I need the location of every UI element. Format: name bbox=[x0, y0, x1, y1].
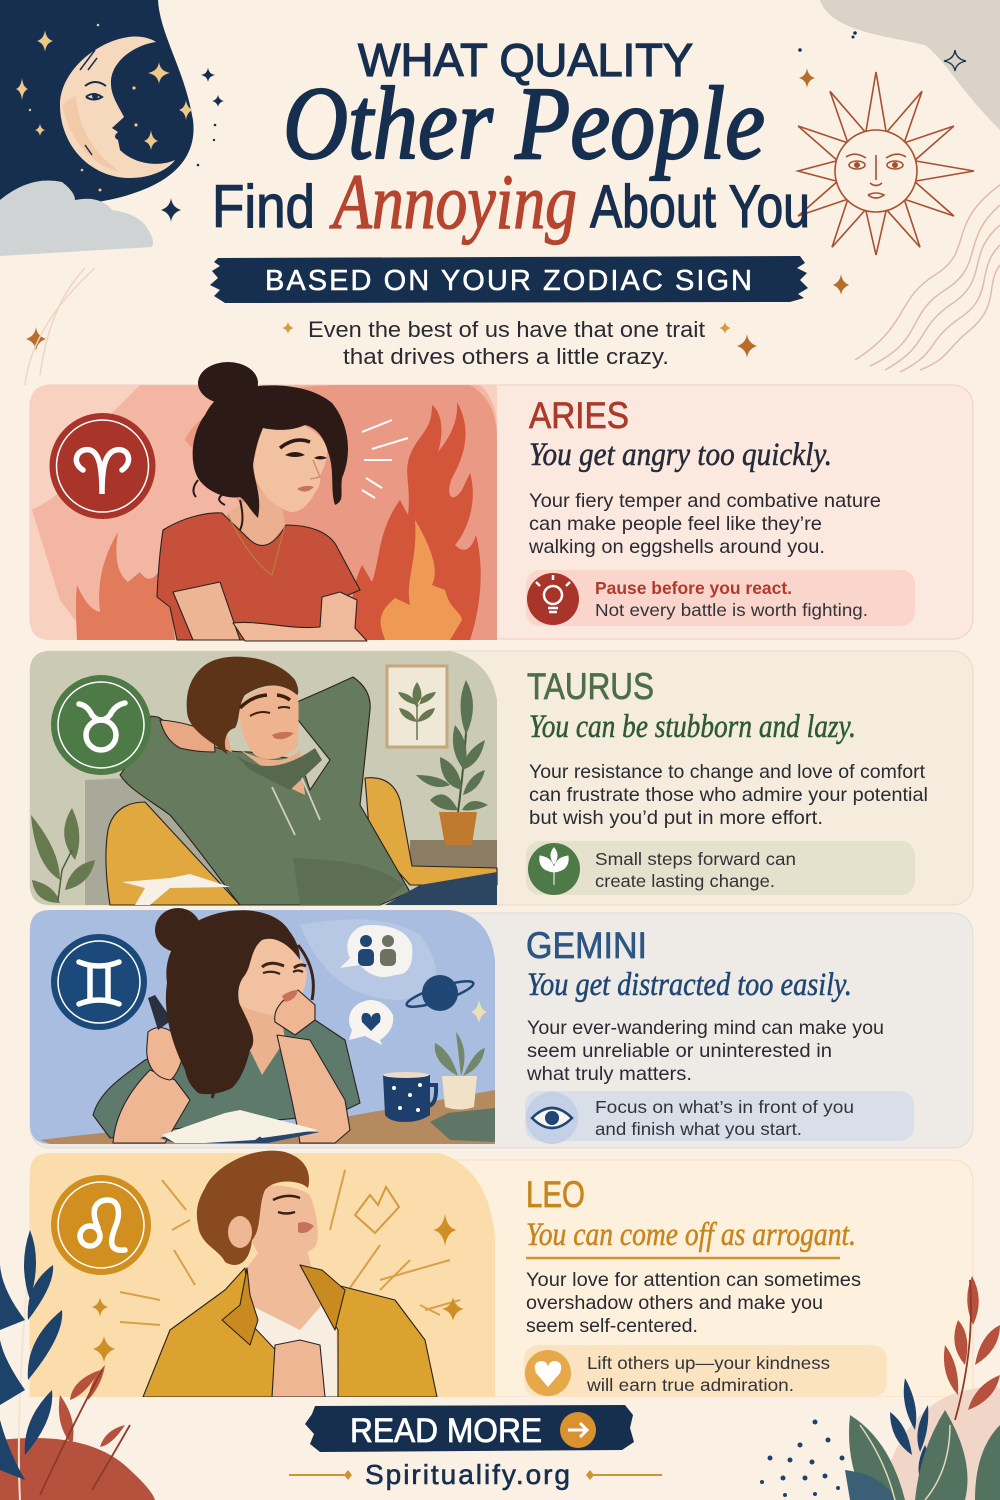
aries heading: ARIES bbox=[529, 395, 629, 436]
leo tip bbox=[524, 1345, 887, 1397]
top-left night sky blob bbox=[0, 0, 194, 205]
gemini body: what truly matters. bbox=[526, 1063, 692, 1085]
desk bbox=[40, 1090, 495, 1144]
flame left bbox=[76, 532, 175, 640]
intro text: that drives others a little crazy. bbox=[343, 344, 669, 369]
icon: eye bbox=[526, 1092, 578, 1144]
panel: leo bbox=[30, 1151, 973, 1397]
footer background wash bbox=[0, 1397, 1000, 1500]
open book bbox=[160, 1110, 320, 1143]
wavy lines bbox=[25, 185, 1000, 385]
leo man bbox=[143, 1151, 437, 1397]
intro text bbox=[308, 317, 705, 369]
gemini heading: GEMINI bbox=[526, 925, 647, 966]
crescent moon with face bbox=[60, 37, 175, 178]
framed leaf art bbox=[387, 666, 447, 747]
gold sparkles bbox=[92, 1214, 464, 1362]
icon: heart bbox=[525, 1350, 571, 1396]
website footer: Spiritualify.org bbox=[365, 1459, 570, 1490]
taurus illustration bbox=[30, 651, 497, 905]
aries body: Your fiery temper and combative nature bbox=[529, 490, 881, 512]
aries illustration bbox=[30, 362, 497, 641]
taurus zodiac icon bbox=[51, 675, 151, 775]
sun rays bbox=[120, 1170, 460, 1325]
leo tip: will earn true admiration. bbox=[586, 1375, 794, 1395]
read more button: READ MORE bbox=[350, 1412, 542, 1450]
left plant bbox=[31, 808, 95, 903]
title line 2 script: Other People bbox=[283, 66, 765, 181]
taurus tip: Small steps forward can bbox=[595, 849, 796, 869]
yellow armchair bbox=[106, 778, 497, 905]
title line 3 script: Annoying bbox=[329, 158, 577, 245]
banner bbox=[210, 256, 808, 303]
flame right bbox=[350, 402, 481, 640]
aries tip: Pause before you react. bbox=[595, 578, 792, 598]
cloud bbox=[0, 180, 153, 256]
paint streak bbox=[122, 874, 230, 905]
taurus body: but wish you’d put in more effort. bbox=[529, 807, 823, 829]
taurus body: can frustrate those who admire your potential bbox=[529, 784, 928, 806]
aries zodiac icon bbox=[50, 413, 156, 519]
aries tip bbox=[526, 570, 915, 626]
aries tip: Not every battle is worth fighting. bbox=[595, 600, 868, 620]
leo tagline: You can come off as arrogant. bbox=[526, 1217, 856, 1253]
taurus man bbox=[120, 657, 410, 905]
anger sparks bbox=[362, 420, 408, 498]
gemini body: seem unreliable or uninterested in bbox=[527, 1040, 832, 1062]
blue jeans bbox=[385, 872, 497, 905]
icon: arrow circle bbox=[560, 1412, 596, 1448]
moon sky stars bbox=[16, 24, 193, 192]
leo tip: Lift others up—your kindness bbox=[587, 1353, 830, 1373]
gemini zodiac icon bbox=[51, 934, 147, 1030]
taurus tagline: You can be stubborn and lazy. bbox=[529, 709, 856, 745]
top-right grey blob bbox=[820, 0, 1000, 130]
taurus heading: TAURUS bbox=[527, 666, 654, 707]
gemini tagline: You get distracted too easily. bbox=[527, 967, 852, 1003]
title line 1: WHAT QUALITY bbox=[358, 34, 693, 86]
aries body bbox=[528, 490, 881, 558]
leo heading: LEO bbox=[526, 1174, 585, 1215]
speech bubble people bbox=[340, 925, 412, 977]
gemini body bbox=[526, 1017, 884, 1085]
leo body: overshadow others and make you bbox=[526, 1292, 823, 1314]
taurus body bbox=[529, 761, 928, 829]
gemini woman bbox=[93, 908, 360, 1143]
crown bbox=[355, 1187, 399, 1233]
bottom-left foliage bbox=[0, 1230, 155, 1500]
leo illustration bbox=[30, 1151, 495, 1397]
gemini tip bbox=[525, 1091, 914, 1144]
gemini tip: and finish what you start. bbox=[595, 1119, 802, 1139]
gemini tip: Focus on what’s in front of you bbox=[595, 1097, 854, 1117]
panel: taurus bbox=[30, 651, 973, 905]
planet bbox=[405, 975, 475, 1011]
leo body bbox=[526, 1269, 861, 1337]
read more button bbox=[305, 1405, 634, 1452]
small potted plant bbox=[435, 1032, 485, 1110]
aries woman bbox=[157, 362, 367, 641]
folded cloth bbox=[430, 1108, 495, 1142]
aries tagline: You get angry too quickly. bbox=[529, 437, 832, 473]
taurus tip: create lasting change. bbox=[595, 871, 775, 891]
icon: leaf bbox=[528, 843, 580, 895]
title line 3 left: Find bbox=[212, 173, 315, 240]
gemini illustration bbox=[30, 908, 495, 1144]
leo zodiac icon bbox=[51, 1175, 151, 1275]
decorative stars header bbox=[161, 31, 966, 222]
title line 3 right: About You bbox=[590, 173, 810, 240]
speech bubble heart bbox=[349, 1000, 393, 1045]
gemini body: Your ever-wandering mind can make you bbox=[527, 1017, 884, 1039]
bottom-right foliage bbox=[845, 1276, 1000, 1500]
leo body: seem self-centered. bbox=[526, 1315, 698, 1337]
aries body: walking on eggshells around you. bbox=[528, 536, 825, 558]
taurus tip bbox=[526, 841, 915, 895]
taurus body: Your resistance to change and love of comfort bbox=[529, 761, 926, 783]
blue mug bbox=[383, 1072, 436, 1122]
leo body: Your love for attention can sometimes bbox=[526, 1269, 861, 1291]
potted plant bbox=[410, 680, 497, 875]
star sparkles bbox=[471, 1000, 487, 1023]
dots bbox=[760, 1420, 844, 1497]
aries body: can make people feel like they’re bbox=[529, 513, 822, 535]
title bbox=[212, 34, 810, 245]
panel: gemini bbox=[30, 908, 973, 1148]
icon: light bulb bbox=[527, 573, 579, 625]
sun illustration bbox=[793, 72, 974, 255]
panel: aries bbox=[30, 362, 973, 641]
website footer bbox=[289, 1459, 662, 1490]
banner: BASED ON YOUR ZODIAC SIGN bbox=[265, 265, 752, 297]
intro text: Even the best of us have that one trait bbox=[308, 317, 705, 342]
